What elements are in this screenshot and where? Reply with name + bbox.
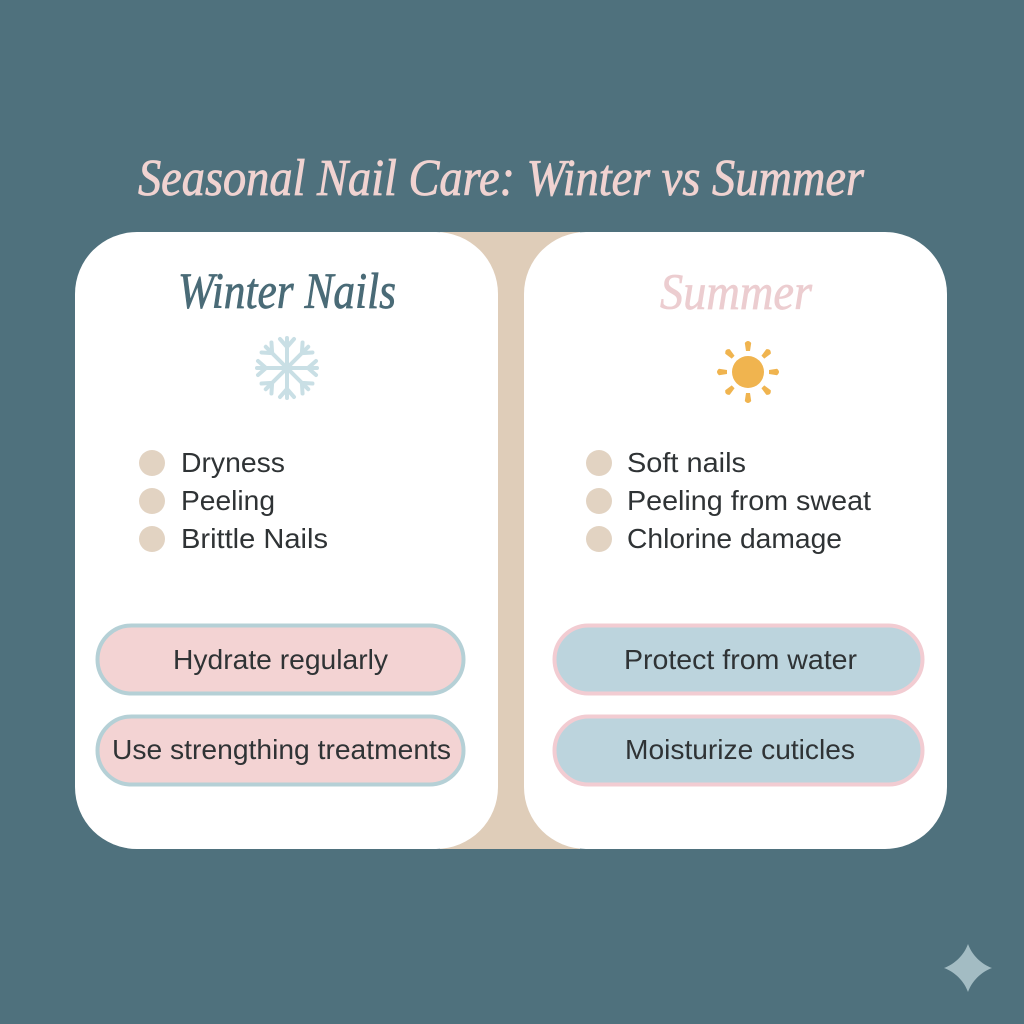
central divider band [440, 232, 580, 849]
winter symptom list: Brittle Nails [181, 523, 328, 554]
winter tip: strengthening [98, 716, 464, 784]
summer tip: protect [554, 626, 922, 694]
icon: sparkle [944, 944, 992, 992]
icon: snowflake [257, 338, 317, 398]
summer tip: protect: Protect from water [624, 644, 857, 675]
panel: summer [524, 232, 947, 849]
winter tip: strengthening: Use strengthing treatments [112, 734, 451, 765]
winter tip: hydrate: Hydrate regularly [173, 644, 388, 675]
summer symptom list [586, 447, 871, 554]
summer symptom list: Chlorine damage [627, 523, 842, 554]
summer symptom list: Peeling from sweat [627, 485, 871, 516]
icon: sun [717, 341, 779, 403]
winter tip: hydrate [98, 626, 464, 694]
summer symptom list: Soft nails [627, 447, 746, 478]
summer heading: Summer [660, 265, 812, 321]
winter symptom list: Peeling [181, 485, 275, 516]
panel: winter [75, 232, 498, 849]
title: Seasonal Nail Care: Winter vs Summer [138, 150, 865, 207]
summer tip: moisturize: Moisturize cuticles [625, 734, 855, 765]
winter symptom list: Dryness [181, 447, 285, 478]
summer tip: moisturize [554, 716, 922, 784]
winter symptom list [139, 447, 328, 554]
winter heading: Winter Nails [178, 264, 396, 320]
